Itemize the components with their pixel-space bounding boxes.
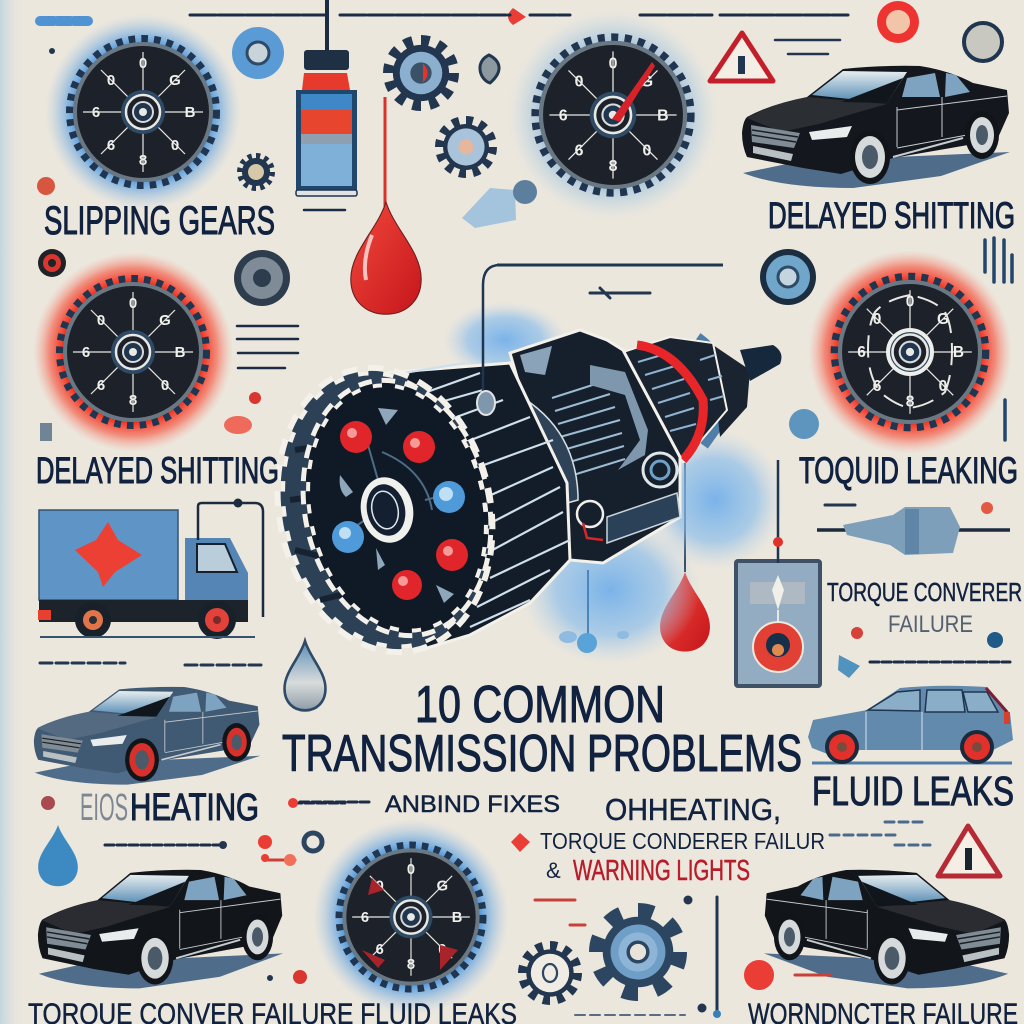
illustration: car bottom left <box>38 870 283 988</box>
illustration: delivery truck <box>38 498 263 639</box>
icon: large red drop <box>351 97 421 314</box>
label: overheating: HEATING <box>130 787 259 829</box>
dial gear: left red glow <box>33 252 233 452</box>
icon: grey oil drop <box>285 641 325 710</box>
label: delayed shifting left: DELAYED SHITTING <box>36 450 279 491</box>
illustration: torque converter part <box>817 507 1010 555</box>
text: overheating list: OHHEATING, <box>605 792 781 827</box>
icon: small red drop <box>660 463 710 652</box>
dial gear: bottom centre <box>313 819 509 1015</box>
icon: small cogs <box>240 41 678 1000</box>
text: overheating list: & <box>546 858 561 883</box>
dial gear: slipping gears <box>45 14 241 210</box>
illustration: hatchback mid right <box>808 686 1013 764</box>
subtitle: and fixes: ANBIND FIXES <box>385 791 560 818</box>
illustration: car bottom right <box>764 870 1009 988</box>
icon: fluid bottle <box>296 0 357 196</box>
text: overheating list: TORQUE CONDERER FAILUR <box>540 828 825 854</box>
dial gear: delayed shifting top with red needle <box>507 9 719 221</box>
label: overheating <box>80 787 259 829</box>
heading: title: TRANSMISSION PROBLEMS <box>282 725 802 783</box>
icon: warning triangle bottom <box>938 826 1000 876</box>
icon: blue drop <box>38 825 78 886</box>
illustration: gauge panel <box>736 460 820 686</box>
icon: warning triangle top <box>710 33 773 81</box>
label: overheating: EIOS <box>80 787 128 829</box>
text: overheating list: WARNING LIGHTS <box>573 855 750 887</box>
label: failure: FAILURE <box>888 611 973 638</box>
text: overheating list <box>540 792 825 887</box>
heading: title: 10 COMMON <box>415 676 665 734</box>
dial gear: right red glow <box>808 250 1012 454</box>
label: slipping gears: SLIPPING GEARS <box>44 199 275 243</box>
illustration: car mid left <box>34 687 260 785</box>
icon: pale blue smudge <box>462 180 537 228</box>
illustration: car top right <box>742 66 1010 188</box>
illustration: central transmission <box>253 265 785 672</box>
heading: title <box>282 676 802 783</box>
